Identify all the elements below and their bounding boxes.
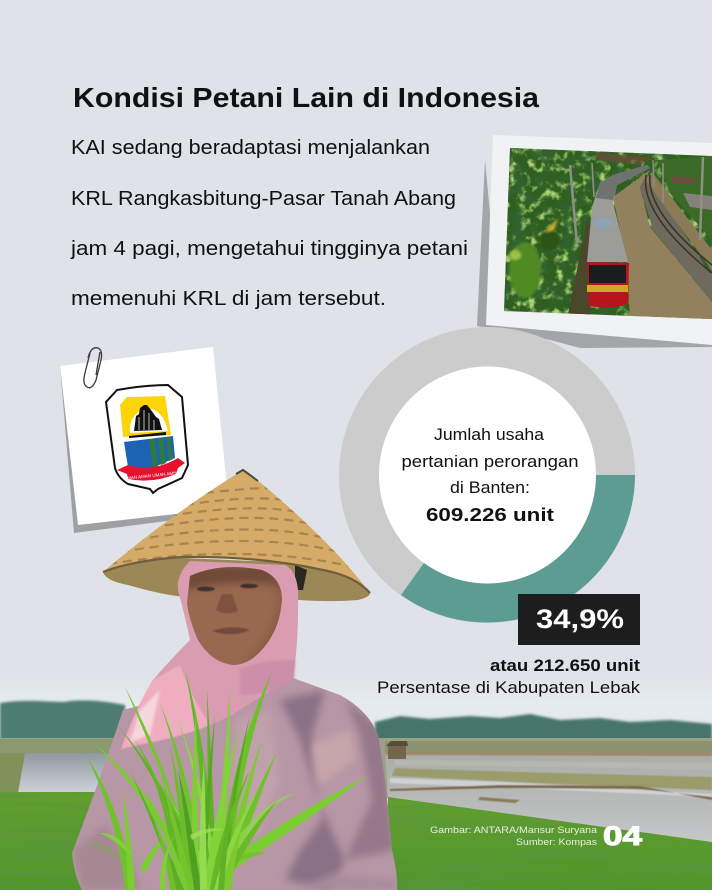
hut xyxy=(386,741,408,759)
donut centre text: Jumlah usaha xyxy=(434,426,545,444)
poles xyxy=(570,157,703,245)
rice seedlings xyxy=(87,670,367,890)
intro text block: KAI sedang beradaptasi menjalankan xyxy=(71,136,430,159)
icon: Lebak regency emblem xyxy=(106,385,188,493)
farmer figure xyxy=(72,470,397,890)
headscarf xyxy=(120,561,298,750)
page number: 04 xyxy=(603,821,642,851)
credits: Sumber: Kompas xyxy=(516,837,597,848)
donut chart: 34,9% xyxy=(339,327,635,623)
credits: Gambar: ANTARA/Mansur Suryana xyxy=(430,825,598,836)
intro text block xyxy=(70,136,468,310)
photo: KRL train on polaroid xyxy=(477,135,712,348)
percentage caption: Persentase di Kabupaten Lebak xyxy=(377,678,641,697)
note paper with Lebak emblem xyxy=(60,347,229,533)
face xyxy=(185,565,285,665)
icon: Lebak regency emblem: IMAN AMAN UMAN AMIN xyxy=(126,470,178,481)
ground and tracks xyxy=(567,156,712,319)
percentage caption: atau 212.650 unit xyxy=(490,656,640,675)
dense inner blades xyxy=(170,745,193,890)
bright foliage xyxy=(509,218,561,298)
train xyxy=(587,165,650,308)
hat underside xyxy=(103,557,370,601)
percentage badge: 34,9% xyxy=(536,604,624,634)
intro text block: memenuhi KRL di jam tersebut. xyxy=(71,287,386,310)
farmer shirt xyxy=(72,678,397,890)
conical straw hat xyxy=(103,470,370,593)
donut centre text: di Banten: xyxy=(450,479,530,497)
percentage badge xyxy=(518,594,640,645)
distant roofs xyxy=(595,152,655,165)
intro text block: jam 4 pagi, mengetahui tingginya petani xyxy=(70,237,468,260)
donut centre text: pertanian perorangan xyxy=(402,453,578,471)
icon: paperclip xyxy=(84,348,102,388)
title: Kondisi Petani Lain di Indonesia xyxy=(73,82,539,113)
landscape: rice field and sky xyxy=(0,698,712,890)
hair shadow xyxy=(295,565,307,590)
donut centre text xyxy=(402,426,578,525)
intro text block: KRL Rangkasbitung-Pasar Tanah Abang xyxy=(71,187,456,210)
credits xyxy=(430,825,598,848)
donut centre text: 609.226 unit xyxy=(426,505,554,525)
percentage caption xyxy=(377,656,641,697)
